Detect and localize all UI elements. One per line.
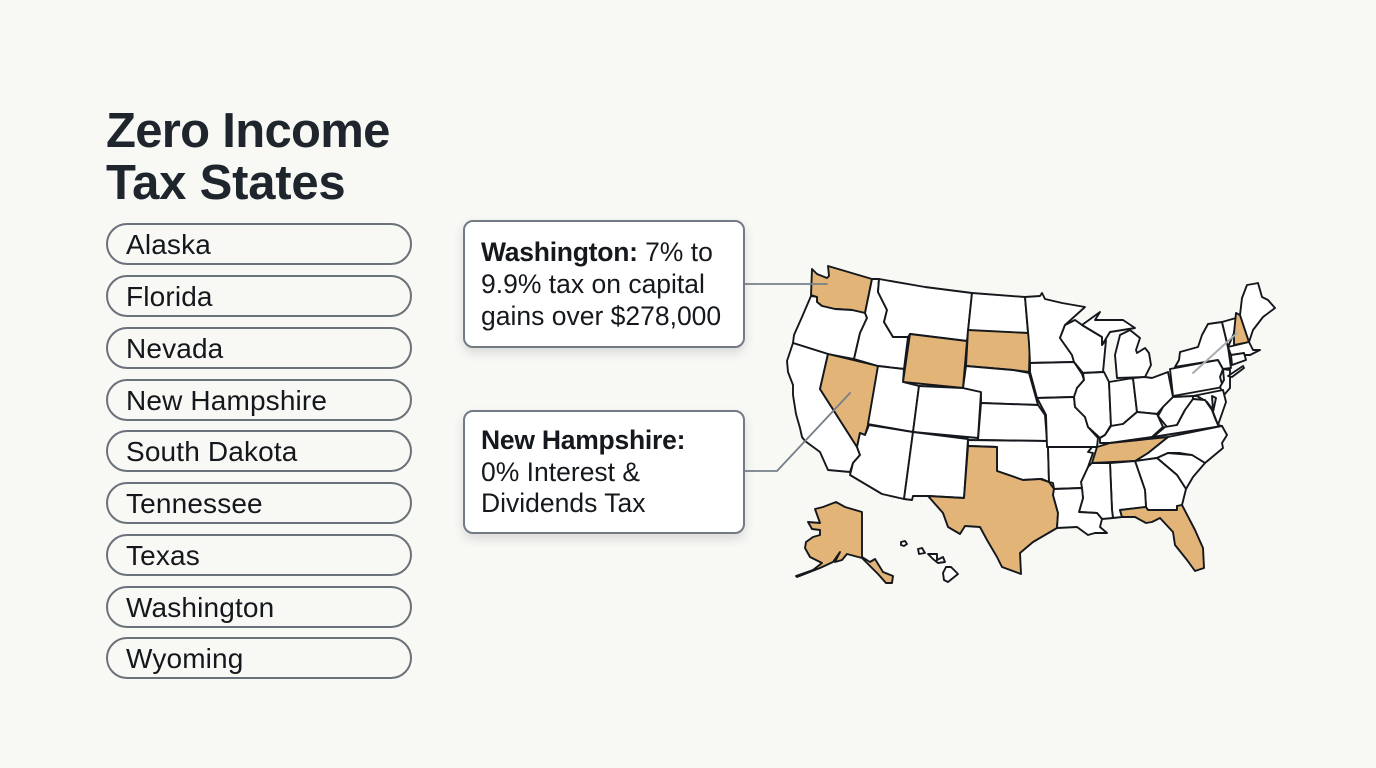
state: Louisiana xyxy=(1053,488,1107,535)
list item: Alaska xyxy=(106,223,412,265)
title: Zero Income xyxy=(106,104,390,158)
list item: Washington xyxy=(106,586,412,628)
state: Florida xyxy=(1120,505,1204,571)
state: Wyoming xyxy=(903,334,967,388)
state: Nebraska xyxy=(963,366,1038,405)
callout: Washington: Washington: 7% to xyxy=(481,237,713,267)
state: Idaho xyxy=(854,279,908,369)
state: Wisconsin xyxy=(1060,320,1106,373)
list item: New Hampshire: New Hampshire xyxy=(126,385,327,416)
state: New Hampshire xyxy=(1234,313,1249,345)
state: Washington xyxy=(811,266,872,313)
state: Colorado xyxy=(913,386,981,438)
list item: Tennessee xyxy=(106,482,412,524)
state: Kentucky xyxy=(1100,412,1163,443)
title: Tax States xyxy=(106,156,345,210)
state: Mississippi xyxy=(1079,463,1113,519)
state: Georgia xyxy=(1135,458,1186,510)
callout: Washington: gains over $278,000 xyxy=(481,301,721,331)
list item: Wyoming xyxy=(106,637,412,679)
state: Nevada xyxy=(820,354,878,447)
callout: Washington xyxy=(463,220,745,348)
list item: Texas xyxy=(106,534,412,576)
list item: South Dakota: South Dakota xyxy=(126,436,297,467)
leader line: New Hampshire pointer xyxy=(1193,333,1237,373)
state: Long Island xyxy=(1228,366,1244,377)
list item: South Dakota xyxy=(106,430,412,472)
state: Arizona xyxy=(850,425,913,499)
list item: Alaska: Alaska xyxy=(126,229,211,260)
state: Minnesota xyxy=(1025,293,1085,363)
state: Massachusetts xyxy=(1228,342,1260,355)
state: New Jersey xyxy=(1220,369,1230,395)
state: West Virginia xyxy=(1158,396,1193,427)
list item: New Hampshire xyxy=(106,379,412,421)
state: Utah xyxy=(868,366,919,432)
state: Arkansas xyxy=(1048,447,1093,489)
state: Michigan lower peninsula xyxy=(1115,330,1151,378)
state: Alaska xyxy=(796,502,893,583)
state: South Dakota xyxy=(966,330,1030,372)
state: Virginia xyxy=(1153,399,1222,437)
state: South Carolina xyxy=(1157,453,1205,489)
callout: New Hampshire: 0% Interest & xyxy=(481,457,640,487)
state: California xyxy=(787,343,860,472)
state: Kansas xyxy=(978,403,1047,441)
callout: Washington: 9.9% tax on capital xyxy=(481,269,705,299)
state: Oklahoma xyxy=(968,440,1049,482)
state: North Carolina xyxy=(1135,426,1227,463)
list item: Florida xyxy=(106,275,412,317)
list item: Tennessee: Tennessee xyxy=(126,488,263,519)
state: Maryland and Delaware xyxy=(1193,390,1226,425)
state: Indiana xyxy=(1109,378,1137,426)
callout: New Hampshire: Dividends Tax xyxy=(481,488,646,518)
state: Vermont xyxy=(1222,318,1236,347)
state: New York xyxy=(1175,322,1231,369)
state: Montana xyxy=(878,279,972,341)
list item: Washington: Washington xyxy=(126,592,274,623)
state: Ohio xyxy=(1133,372,1173,414)
leader line: New Hampshire callout xyxy=(744,393,850,471)
list item: Texas: Texas xyxy=(126,540,200,571)
group: Hawaii islands xyxy=(901,541,958,582)
list item: Nevada: Nevada xyxy=(126,333,223,364)
state: Michigan upper peninsula xyxy=(1082,312,1135,345)
state: New Mexico xyxy=(904,432,968,500)
state: Iowa xyxy=(1030,362,1084,398)
title xyxy=(106,104,390,210)
list item: Florida: Florida xyxy=(126,281,213,312)
state: Oregon xyxy=(793,296,867,359)
callout: New Hampshire: New Hampshire: xyxy=(481,425,685,455)
panel: list of zero income tax states xyxy=(106,223,412,679)
list item: Wyoming: Wyoming xyxy=(126,643,244,674)
state: Maine xyxy=(1240,283,1275,342)
state: Missouri xyxy=(1037,397,1098,447)
state: Pennsylvania xyxy=(1170,360,1223,396)
state: North Dakota xyxy=(968,293,1028,333)
state: Tennessee xyxy=(1092,437,1168,463)
callout: New Hampshire xyxy=(463,410,745,534)
state: Texas xyxy=(928,446,1058,574)
state: Alabama xyxy=(1110,461,1146,518)
state: Illinois xyxy=(1074,372,1111,438)
leader line: Washington callout xyxy=(744,283,827,285)
list item: Nevada xyxy=(106,327,412,369)
state: Connecticut and Rhode Island xyxy=(1231,353,1246,365)
